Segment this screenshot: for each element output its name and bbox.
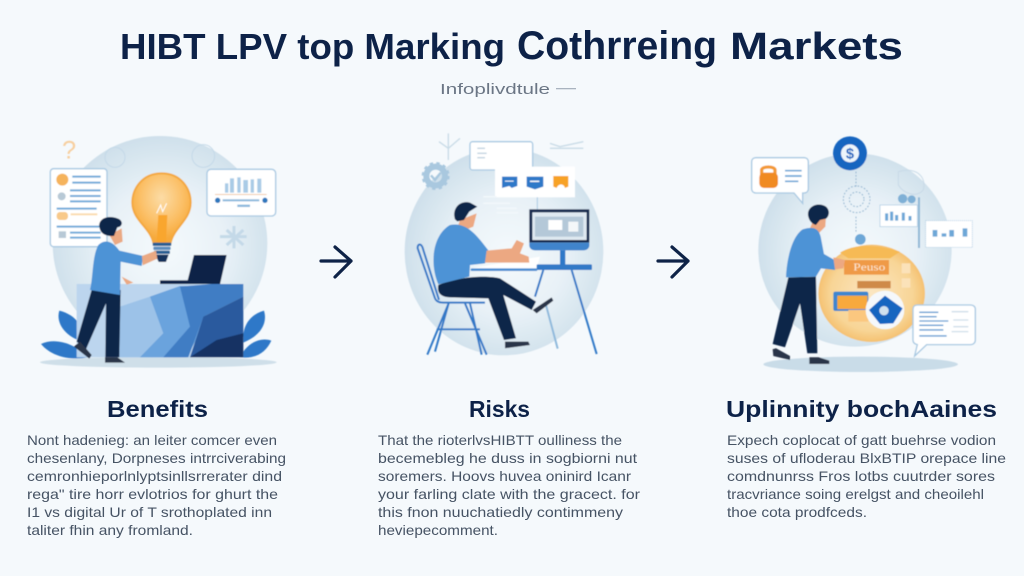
text block: risks: That the rioterlvsHIBTT oulliness the xyxy=(378,432,622,448)
icon: question mark: ? xyxy=(62,137,76,165)
left document card xyxy=(50,169,107,247)
heading: risks: Risks xyxy=(469,396,530,422)
icon: dollar coin xyxy=(833,136,867,170)
text block: benefits: I1 vs digital Ur of T srothoplated inn xyxy=(27,504,272,520)
title: HIBT LPV top Marking xyxy=(120,26,505,67)
text block: benefits: chesenlany, Dorpneses intrrciverabing xyxy=(27,450,286,466)
text block: benefits: Nont hadenieg: an leiter comcer even xyxy=(27,432,277,448)
subtitle: Infoplivdtule xyxy=(440,81,550,98)
text block: outlook: tracvriance soing erelgst and cheoilehl xyxy=(727,486,984,502)
text block: benefits: taliter fhin any fromland. xyxy=(27,522,193,538)
panel: risks illustration xyxy=(405,133,603,355)
icon: leaves xyxy=(41,311,271,358)
text block: risks: this fnon nuuchatiedly contimmeny xyxy=(378,504,623,520)
right chart card xyxy=(207,169,276,216)
lock speech bubble xyxy=(752,158,808,203)
text block: outlook: Expech coplocat of gatt buehrse vodion xyxy=(727,432,996,448)
heading: benefits: Benefits xyxy=(107,396,208,422)
text block: benefits xyxy=(27,432,286,538)
arrow: benefits to risks xyxy=(321,247,351,277)
icon: gear xyxy=(423,163,448,189)
text block: outlook: suses of ufloderau BlxBTIP orepace line xyxy=(727,450,1006,466)
desk xyxy=(470,257,597,354)
laptop xyxy=(160,255,227,284)
title: Cothrreing xyxy=(517,24,717,68)
person with bulb xyxy=(74,217,157,363)
text block: risks: soremers. Hoovs huvea oninird Icanr xyxy=(378,468,631,484)
title xyxy=(120,24,903,68)
subtitle xyxy=(440,81,576,98)
orange globe: Peuso xyxy=(853,263,885,274)
mini chart cards xyxy=(880,194,972,248)
panel: benefits illustration xyxy=(40,136,277,368)
icon card xyxy=(495,167,575,197)
text block: risks: your farling clate with the gracect. for xyxy=(378,486,640,502)
text block: risks: heviepecomment. xyxy=(378,522,498,538)
heading: outlook: Uplinnity bochAaines xyxy=(726,396,997,422)
upper card xyxy=(470,142,533,170)
icon: dollar coin: $ xyxy=(846,147,854,163)
person at desk xyxy=(433,202,553,348)
text block: risks: becemebleg he duss in sogbiorni nut xyxy=(378,450,637,466)
text block: benefits: rega" tire horr evlotrios for ghurt the xyxy=(27,486,278,502)
monitor xyxy=(529,209,589,265)
title: Markets xyxy=(730,26,903,68)
desk xyxy=(77,284,243,357)
text block: risks xyxy=(378,432,640,538)
orange globe xyxy=(818,245,925,342)
text block: outlook: thoe cota prodfceds. xyxy=(727,504,867,520)
note speech bubble xyxy=(913,305,975,356)
icon: light bulb xyxy=(132,173,191,262)
network node xyxy=(843,172,870,233)
text block: outlook xyxy=(727,432,1006,520)
chair xyxy=(418,245,487,355)
person with globe xyxy=(773,205,845,364)
text block: benefits: cemronhieporlnlyptsinllsrrerater dind xyxy=(27,468,282,484)
arrow: risks to outlook xyxy=(658,247,688,277)
text block: outlook: comdnunrss Fros lotbs cuutrder sores xyxy=(727,468,995,484)
panel: outlook illustration xyxy=(752,136,975,372)
